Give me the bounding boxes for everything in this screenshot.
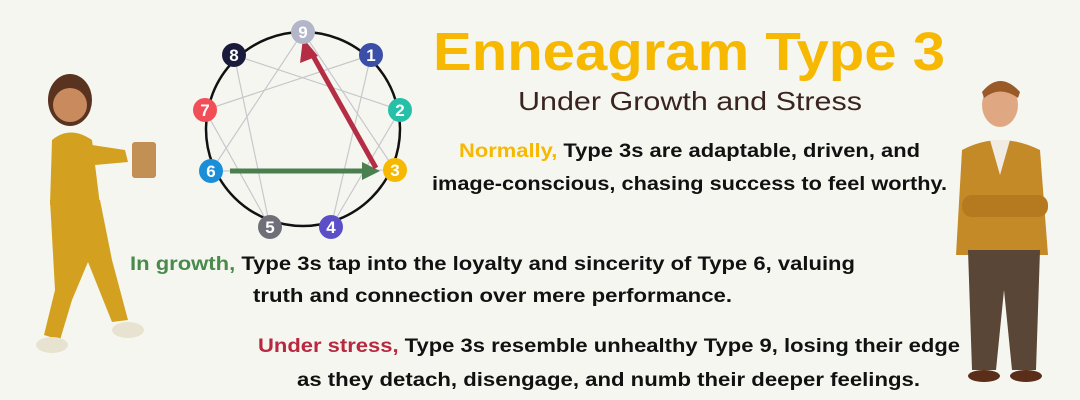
nodes: 9	[298, 23, 308, 42]
arrow: stress 3 to 9	[300, 38, 376, 168]
illustration: man with crossed arms	[956, 81, 1048, 382]
nodes: 1	[366, 46, 376, 65]
text: growth: truth and connection over mere performance.	[253, 286, 732, 307]
nodes: 4	[326, 218, 336, 237]
text: stress	[258, 336, 960, 391]
text: growth	[130, 254, 855, 307]
title: Enneagram Type 3	[433, 22, 945, 82]
text: stress: Under stress, Type 3s resemble unhealthy Type 9, losing their edge	[258, 336, 960, 357]
text: normally: Normally, Type 3s are adaptable, driven, and	[459, 141, 920, 162]
nodes: 3	[390, 161, 400, 180]
nodes	[193, 20, 412, 239]
subtitle: Under Growth and Stress	[518, 86, 862, 116]
text: growth: In growth, Type 3s tap into the loyalty and sincerity of Type 6, valuing	[130, 254, 855, 275]
nodes: 8	[229, 46, 239, 65]
nodes: 6	[206, 162, 216, 181]
arrow: growth 6 to 3	[230, 162, 380, 180]
enneagram diagram	[193, 20, 412, 239]
illustration: woman walking	[36, 74, 156, 353]
nodes: 5	[265, 218, 275, 237]
text: normally: image-conscious, chasing success to feel worthy.	[432, 174, 947, 195]
nodes: 2	[395, 101, 405, 120]
text: normally	[432, 141, 947, 195]
nodes: 7	[200, 101, 210, 120]
text: stress: as they detach, disengage, and numb their deeper feelings.	[297, 370, 920, 391]
